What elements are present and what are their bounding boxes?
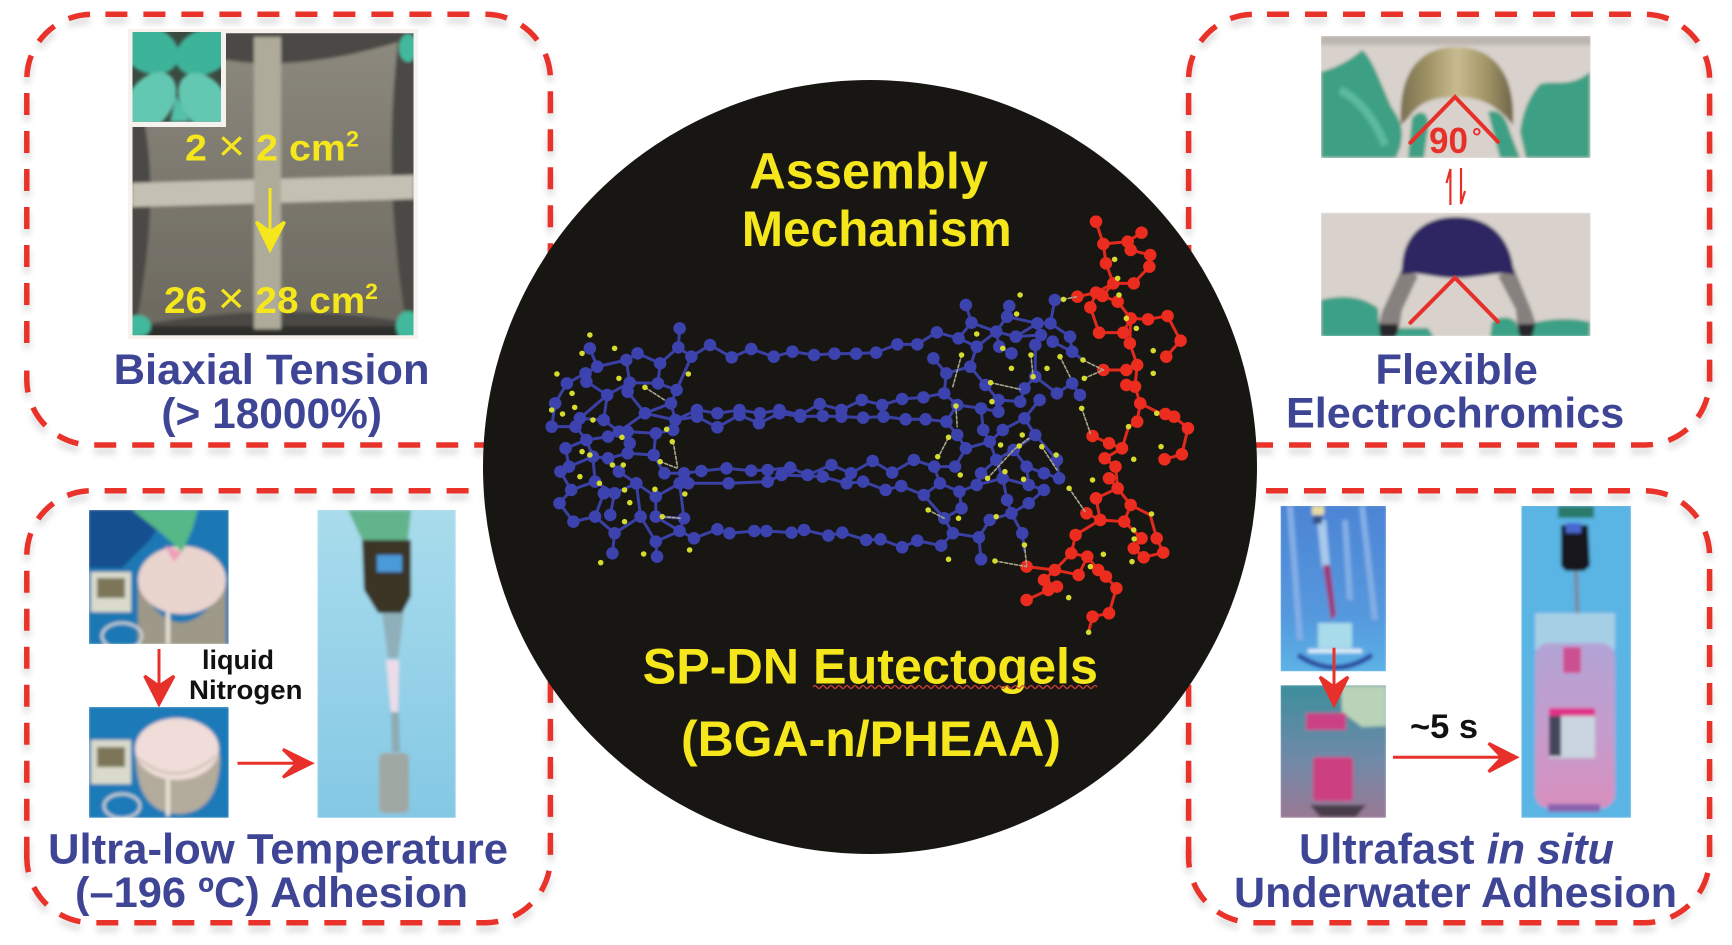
label: 2 x 2 cm2: 2 × 2 cm (185, 122, 340, 171)
photo: adhesive lowered into water (1280, 506, 1386, 672)
label: 26 x 28 cm2: 2 (365, 279, 378, 304)
arrow: yellow down (256, 188, 285, 250)
arrow: red down (1320, 648, 1348, 705)
panel: central black circle (483, 80, 1257, 854)
heading: Assembly: Assembly (749, 142, 989, 199)
heading: Ultra-low Temperature: Ultra-low Temperature (48, 825, 508, 873)
arrow: red right (1393, 743, 1516, 772)
heading: Mechanism: Mechanism (742, 201, 1012, 257)
photo: hanging weight tensile test (318, 510, 456, 818)
photo: stretched film with rulers (128, 29, 418, 339)
panel: biaxial tension (27, 14, 550, 445)
photo: bonded weight hanging in water (1521, 506, 1631, 818)
heading: greater than 18000 percent: (> 18000%) (161, 390, 382, 438)
heading: Flexible: Flexible (1375, 346, 1538, 394)
heading: Electrochromics: Electrochromics (1286, 390, 1624, 438)
label: liquid: liquid (202, 645, 274, 675)
label: Nitrogen: Nitrogen (189, 675, 302, 705)
photo: gold bent device (1321, 36, 1590, 158)
label: about 5 s: ~5 s (1410, 708, 1478, 746)
heading: minus 196 C Adhesion: (–196 ºC) Adhesion (75, 869, 468, 917)
arrow: red right (238, 749, 311, 777)
panel: flexible electrochromics (1189, 14, 1710, 445)
heading: Underwater Adhesion: Underwater Adhesion (1234, 869, 1677, 917)
arrow: red down (145, 649, 174, 704)
photo: dewar covered (89, 707, 229, 818)
hydrogen bonds (645, 297, 1103, 567)
heading: BGA-n/PHEAA: (BGA-n/PHEAA) (681, 711, 1061, 767)
red chain atoms (1027, 222, 1188, 617)
label: 2 x 2 cm2: 2 (346, 127, 359, 152)
marker: lower chevron (1410, 278, 1498, 323)
label: 90 degrees: 90 (1429, 120, 1468, 161)
photo: pink adhesive on weight in water (1280, 685, 1386, 818)
heading: Biaxial Tension: Biaxial Tension (114, 346, 430, 394)
panel: ultrafast underwater adhesion (1189, 491, 1710, 923)
blue polymer bonds (552, 300, 1083, 559)
photo: sample in liquid nitrogen dewar with glove (89, 510, 229, 644)
photo: purple bent device (1321, 212, 1590, 336)
inset: small gel held by gloves (132, 32, 221, 122)
label: 26 x 28 cm2: 26 × 28 cm (164, 274, 360, 323)
marker: upper 90 degree chevron (1410, 97, 1498, 143)
spelling squiggle (813, 686, 1097, 688)
blue polymer atoms (552, 300, 1080, 559)
red chain bonds (1027, 222, 1188, 632)
label: degree mark: ° (1472, 124, 1482, 151)
heading: SP-DN Eutectogels: SP-DN Eutectogels (643, 638, 1098, 694)
arrow: reversible (1446, 168, 1465, 205)
hydrogen atoms (552, 259, 1161, 632)
panel: ultra-low temperature adhesion (27, 491, 550, 923)
heading: Ultrafast in situ: Ultrafast in situ (1299, 825, 1614, 873)
molecular model (552, 222, 1188, 632)
